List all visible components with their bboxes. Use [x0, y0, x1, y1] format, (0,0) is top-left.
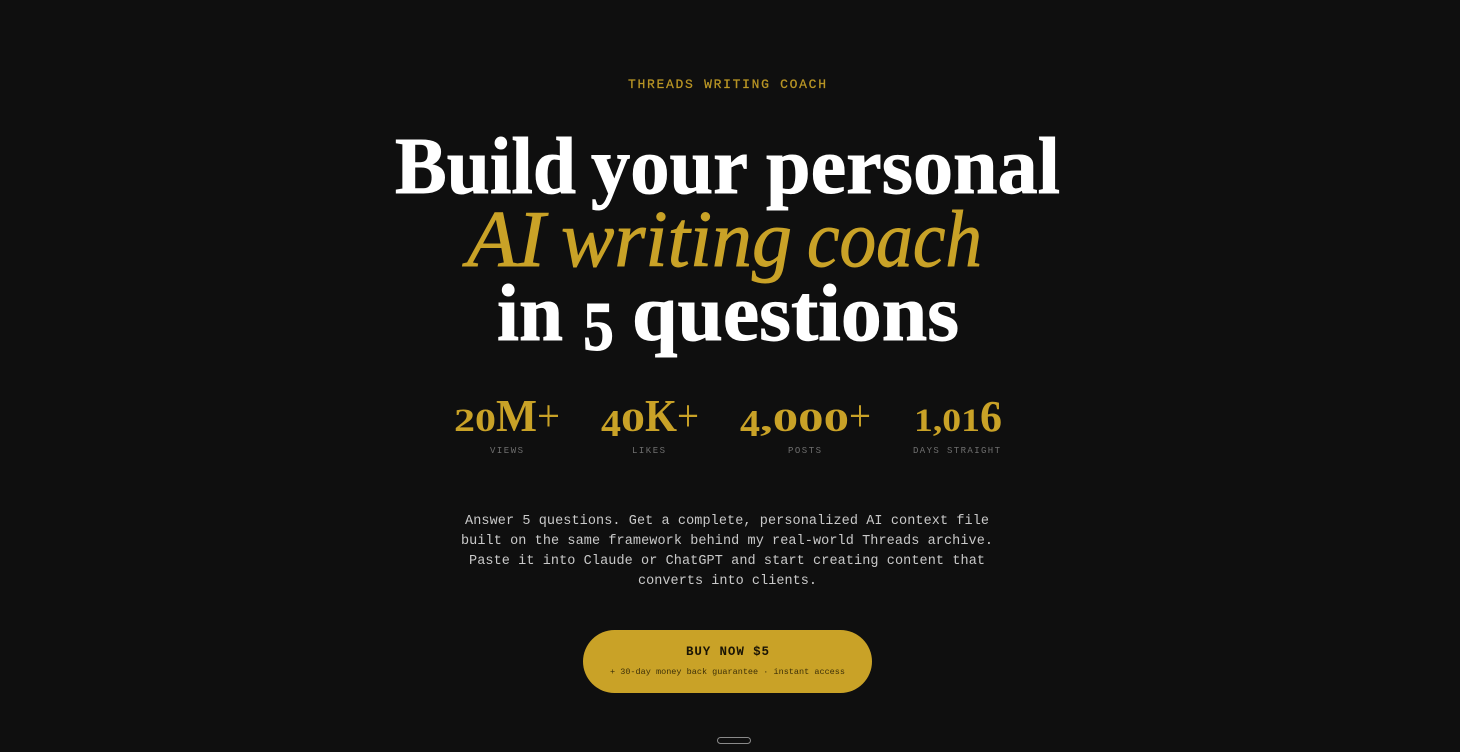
stat: posts: POSTS: [788, 446, 821, 456]
stat: days straight: 1,01: [914, 403, 980, 439]
stat: posts: ,000: [760, 403, 849, 439]
scroll indicator: [718, 738, 750, 744]
title line 3: 5: [583, 289, 614, 366]
description paragraph: converts into clients.: [638, 574, 817, 589]
stat: views: VIEWS: [490, 446, 523, 456]
description paragraph: Answer 5 questions. Get a complete, personalized AI context file: [465, 514, 989, 529]
title line 1: personal: [766, 123, 1060, 211]
stat: likes: [601, 390, 699, 456]
stat: days straight: [913, 392, 1002, 456]
title line 1: Build: [395, 123, 576, 211]
title line 3: questions: [632, 270, 959, 358]
stat: views: 20: [454, 403, 496, 439]
stat: views: +: [537, 390, 560, 441]
title line 1: your: [591, 123, 748, 211]
description paragraph: built on the same framework behind my real-world Threads archive.: [461, 534, 993, 549]
title line 2: writing: [561, 196, 792, 284]
stat: posts: [740, 390, 871, 456]
title line 2: coach: [807, 196, 982, 284]
stats row: [454, 390, 1002, 456]
stat: posts: +: [849, 390, 871, 441]
stat: days straight: DAYS STRAIGHT: [913, 446, 1001, 456]
stat: likes: LIKES: [632, 446, 665, 456]
title line 2: AI: [462, 196, 548, 284]
title line 3: in: [497, 270, 563, 358]
title line 3: [497, 270, 959, 366]
title line 2: [462, 196, 982, 284]
stat: likes: 0: [621, 403, 645, 439]
stat: likes: K: [645, 390, 677, 441]
stat: views: M: [496, 390, 537, 441]
stat: likes: 4: [601, 403, 621, 445]
eyebrow label: THREADS WRITING COACH: [628, 77, 826, 92]
buy now button: + 30-day money back guarantee · instant access: [610, 667, 845, 677]
title: [395, 123, 1060, 366]
stat: posts: 4: [740, 403, 760, 445]
title line 1: [395, 123, 1060, 211]
description paragraph: Paste it into Claude or ChatGPT and start creating content that: [469, 554, 985, 569]
stat: days straight: 6: [980, 392, 1002, 441]
stat: views: [454, 390, 560, 456]
stat: likes: +: [677, 390, 699, 441]
buy now button: BUY NOW $5: [686, 645, 769, 659]
buy now button: [583, 630, 872, 693]
description paragraph: [461, 514, 993, 589]
